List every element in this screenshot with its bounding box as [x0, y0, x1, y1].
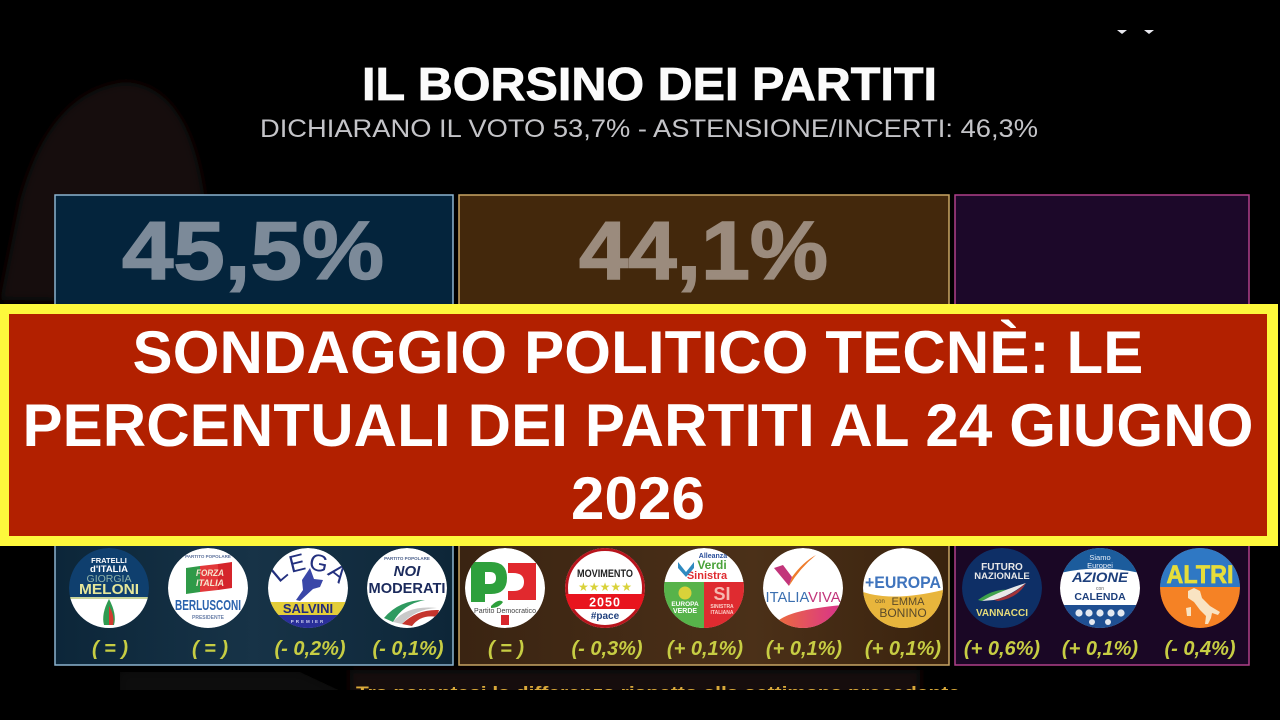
- total: 44,1%: 44,1%: [579, 204, 828, 297]
- logo: Forza Italia: BERLUSCONI: [175, 597, 241, 614]
- logo: Azione: con: [1096, 586, 1104, 592]
- logo: Lega: [265, 548, 352, 628]
- change labels: (+ 0,1%): [865, 638, 941, 660]
- logo: +Europa: con: [875, 599, 885, 605]
- change labels: ( = ): [192, 638, 228, 660]
- logo: Italia Viva: [763, 548, 843, 628]
- logo: Altri: ALTRI: [1166, 561, 1234, 589]
- logo: Forza Italia: PARTITO POPOLARE: [185, 554, 231, 559]
- banner headline: PERCENTUALI DEI PARTITI AL 24 GIUGNO: [22, 392, 1254, 459]
- change labels: (- 0,2%): [274, 638, 346, 660]
- logo: Italia Viva: ITALIAVIVA: [766, 589, 840, 606]
- logo: Alleanza Verdi Sinistra: SI: [713, 584, 731, 604]
- title: IL BORSINO DEI PARTITI: [362, 58, 937, 110]
- logo: Forza Italia: PRESIDENTE: [192, 615, 225, 621]
- logo: Futuro Nazionale: [962, 548, 1042, 628]
- logo: Noi Moderati: MODERATI: [368, 580, 446, 597]
- logo: Fratelli d'Italia: MELONI: [79, 582, 139, 598]
- logo: +Europa: BONINO: [879, 606, 927, 620]
- small white marks: [1117, 30, 1154, 34]
- logo: Alleanza Verdi Sinistra: Verdi: [697, 558, 727, 572]
- footnote, cut off at the bottom: Tra parentesi la differenza rispetto alla settimana precedente: [356, 683, 960, 702]
- logo: Noi Moderati: NOI: [394, 563, 421, 580]
- logo: Alleanza Verdi Sinistra: ITALIANA: [711, 610, 734, 616]
- logo: Movimento 5 Stelle: #pace: [591, 611, 620, 622]
- logo: Lega: E: [286, 549, 308, 579]
- logo: Azione: Europei: [1087, 561, 1113, 570]
- panel: altri partiti: [955, 195, 1249, 665]
- logo: Movimento 5 Stelle: MOVIMENTO: [577, 568, 633, 580]
- banner headline: [0, 304, 1278, 546]
- logo: +Europa: EMMA: [892, 596, 925, 608]
- logo: Azione: AZIONE: [1071, 569, 1129, 585]
- logo: Futuro Nazionale: FUTURO: [981, 562, 1023, 573]
- logo: Partito Democratico: Partito Democratico: [474, 608, 536, 615]
- change labels: ( = ): [488, 638, 524, 660]
- logo: Movimento 5 Stelle: 2050: [589, 596, 621, 610]
- logo: Lega: G: [307, 549, 330, 579]
- logo: Futuro Nazionale: VANNACCI: [976, 608, 1028, 619]
- banner headline: SONDAGGIO POLITICO TECNÈ: LE: [133, 319, 1143, 386]
- logo: Movimento 5 Stelle: ★★★★★: [578, 580, 632, 594]
- change labels: (+ 0,1%): [1062, 638, 1138, 660]
- change labels: (+ 0,1%): [766, 638, 842, 660]
- change labels: (- 0,3%): [571, 638, 643, 660]
- logo: Movimento 5 Stelle: [565, 548, 645, 628]
- logo: +Europa: [863, 548, 943, 628]
- logo: Alleanza Verdi Sinistra: EUROPA: [671, 601, 699, 608]
- logo: Azione: CALENDA: [1074, 591, 1126, 603]
- logo: Altri: [1160, 548, 1240, 628]
- change labels: (+ 0,1%): [667, 638, 743, 660]
- logo: Fratelli d'Italia: [69, 548, 149, 628]
- logo: Fratelli d'Italia: GIORGIA: [87, 573, 131, 585]
- banner headline: 2026: [571, 465, 705, 532]
- logo: Lega: SALVINI: [283, 601, 333, 616]
- logo: Fratelli d'Italia: FRATELLI: [91, 556, 127, 565]
- logo: Lega: L: [265, 559, 293, 588]
- logo: Futuro Nazionale: NAZIONALE: [974, 571, 1030, 582]
- logo: Alleanza Verdi Sinistra: VERDE: [673, 608, 697, 615]
- logo: Azione: Siamo: [1089, 553, 1111, 562]
- logo: Noi Moderati: [367, 548, 447, 628]
- logo: Azione: [1060, 548, 1140, 628]
- logo: Alleanza Verdi Sinistra: [664, 548, 744, 628]
- total: 45,5%: 45,5%: [122, 204, 384, 297]
- panel: centrosinistra: [459, 195, 949, 665]
- logo: Forza Italia: FORZA: [196, 568, 224, 578]
- change labels: (- 0,1%): [372, 638, 444, 660]
- logo: Partito Democratico: [465, 548, 545, 628]
- change labels: [92, 638, 1236, 660]
- logo: +Europa: +EUROPA: [865, 573, 941, 592]
- logo: Alleanza Verdi Sinistra: Sinistra: [687, 570, 728, 582]
- logo: Lega: PREMIER: [291, 619, 325, 624]
- logo: Forza Italia: ITALIA: [196, 578, 224, 588]
- logo: Alleanza Verdi Sinistra: Alleanza: [699, 553, 727, 560]
- logo: Noi Moderati: PARTITO POPOLARE: [384, 556, 430, 561]
- change labels: ( = ): [92, 638, 128, 660]
- logo: Lega: A: [323, 558, 352, 589]
- change labels: (+ 0,6%): [964, 638, 1040, 660]
- logo: Forza Italia: [168, 548, 248, 628]
- logo: Fratelli d'Italia: d'ITALIA: [90, 564, 128, 575]
- panel: centrodestra: [55, 195, 453, 665]
- change labels: (- 0,4%): [1164, 638, 1236, 660]
- logo: Alleanza Verdi Sinistra: SINISTRA: [710, 604, 734, 610]
- subtitle: DICHIARANO IL VOTO 53,7% - ASTENSIONE/INCERTI: 46,3%: [260, 115, 1038, 143]
